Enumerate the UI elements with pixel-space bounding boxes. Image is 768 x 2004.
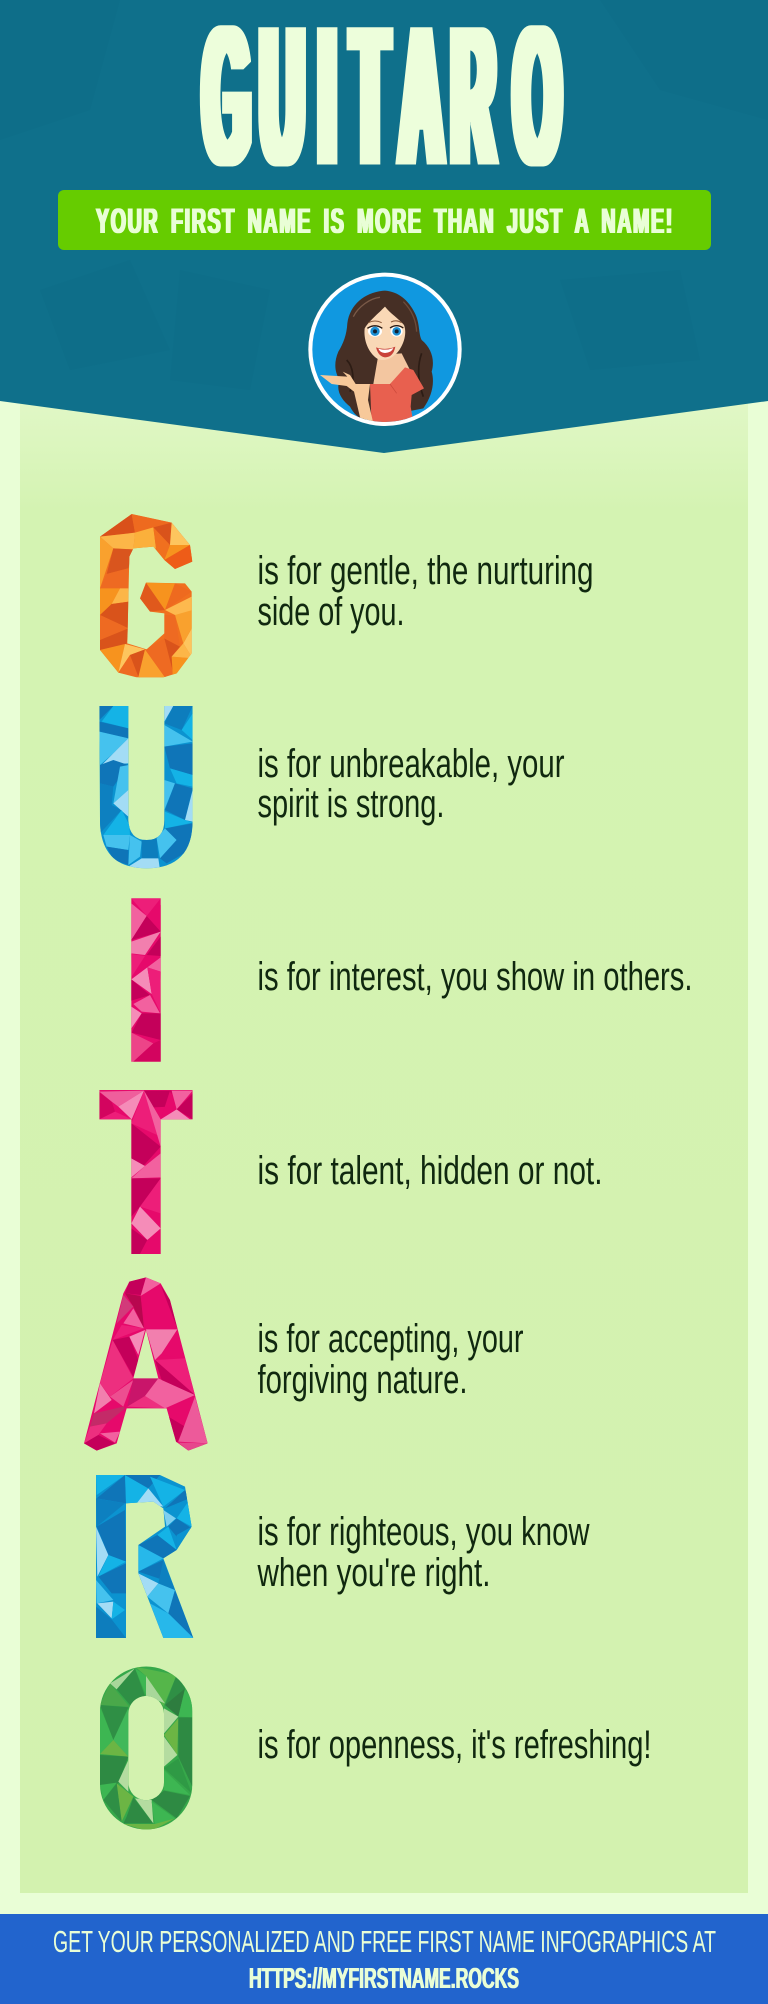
face (364, 307, 405, 360)
text block: U line: is for unbreakable, your (258, 742, 564, 786)
neck (373, 353, 410, 385)
text block: U line (258, 742, 564, 826)
text block: R line: is for righteous, you know (258, 1510, 590, 1554)
text block: G line: is for gentle, the nurturing (258, 549, 594, 593)
footer url: HTTPS://MYFIRSTNAME.ROCKS (249, 1963, 519, 1995)
text block: G line (258, 549, 594, 634)
text block: R line (257, 1510, 590, 1595)
letter G polygon icon (100, 514, 192, 678)
shirt (370, 367, 424, 427)
footer bar (0, 1914, 768, 2004)
text block: U line: spirit is strong. (258, 782, 444, 826)
arm and hand (320, 372, 373, 423)
letter A polygon icon (83, 1275, 210, 1452)
text block: A line (258, 1317, 524, 1402)
header banner (0, 0, 768, 453)
panel: letters (20, 390, 748, 1893)
smile (376, 347, 395, 357)
text block: A line: is for accepting, your (258, 1317, 524, 1361)
text block: R line: when you're right. (257, 1551, 490, 1595)
text block: G line: side of you. (258, 590, 404, 634)
letter T polygon icon (97, 1088, 195, 1257)
hair (335, 291, 433, 420)
letter O polygon icon (98, 1665, 195, 1832)
text block: T line: is for talent, hidden or not. (258, 1149, 602, 1193)
subtitle bar (58, 190, 711, 250)
letter I polygon icon (131, 898, 161, 1062)
eyes (367, 321, 403, 337)
letter U polygon icon (97, 703, 197, 870)
text block: A line: forgiving nature. (258, 1358, 468, 1402)
avatar: woman in circle (308, 273, 462, 427)
letter R polygon icon (93, 1473, 195, 1640)
